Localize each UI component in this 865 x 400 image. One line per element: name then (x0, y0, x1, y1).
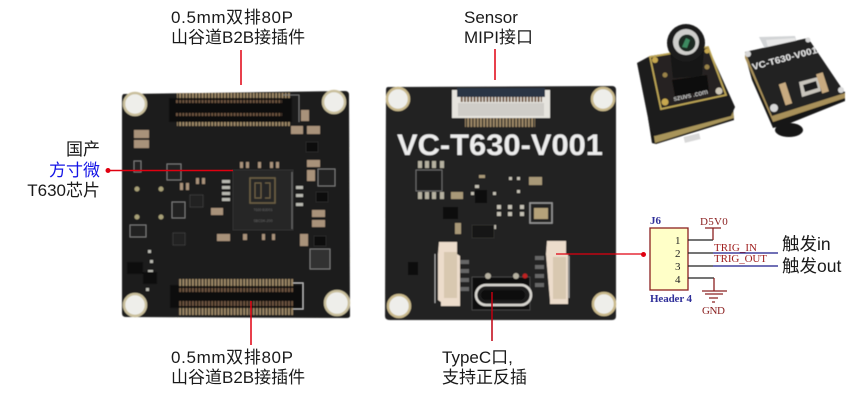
photo: board stack (745, 36, 845, 137)
panel: board front (122, 91, 350, 318)
pcb body back (385, 86, 616, 320)
schematic labels: 2 (675, 248, 680, 260)
schematic labels: J6 (650, 215, 662, 227)
callout: sensor MIPI label (464, 8, 533, 80)
white connector right (535, 241, 569, 304)
small ICs front (130, 142, 335, 269)
photo: camera module (637, 24, 735, 144)
main chip T630: SBCDK-200 (253, 219, 273, 223)
callout: bottom connector label: 山谷道B2B接插件 (171, 368, 305, 387)
callout: Type-C label (442, 292, 527, 387)
top connector (169, 93, 299, 126)
callout: bottom connector label (171, 301, 305, 387)
main chip T630: T630 B3001 (253, 208, 273, 212)
white connector left (435, 242, 469, 306)
callout: bottom connector label: 0.5mm双排80P (171, 348, 293, 367)
schematic labels: 1 (675, 235, 680, 247)
product photos (637, 24, 845, 144)
callout: top connector label (171, 8, 305, 85)
schematic labels: Header 4 (650, 293, 692, 305)
label: trigger out: 触发out (782, 256, 841, 276)
bottom connector (170, 279, 303, 315)
callout: chip label: T630芯片 (27, 181, 100, 200)
main chip T630 (233, 170, 293, 230)
schematic labels: D5V0 (700, 216, 728, 228)
pcb body front (122, 91, 350, 318)
net lines (713, 253, 778, 266)
schematic labels (650, 215, 767, 317)
schematic labels: 4 (675, 274, 681, 286)
callout: chip label: 方寸微 (49, 161, 100, 180)
small components front (134, 110, 325, 246)
callout: chip label (27, 140, 233, 200)
photo: board stack: VC-T630-V001 (751, 45, 818, 72)
callout: Type-C label: TypeC口, (442, 348, 513, 367)
callout: Type-C label: 支持正反插 (442, 368, 527, 387)
callout: top connector label: 0.5mm双排80P (171, 8, 293, 27)
mounting holes back (387, 88, 615, 317)
callout: chip label: 国产 (66, 140, 100, 159)
callout: sensor MIPI label: Sensor (464, 8, 518, 27)
components back (408, 161, 552, 275)
callout: sensor MIPI label: MIPI接口 (464, 28, 533, 47)
schematic labels: TRIG_IN (714, 242, 757, 254)
callout: top connector label: 山谷道B2B接插件 (171, 28, 305, 47)
schematic: J6 header (650, 215, 778, 317)
photo: camera module: szuvs .com (673, 89, 709, 103)
mounting holes front (124, 91, 349, 316)
power and ground (702, 228, 727, 302)
board silk title: VC-T630-V001 (397, 129, 603, 162)
sensor FPC connector (452, 88, 550, 127)
schematic labels: TRIG_OUT (714, 253, 767, 265)
schematic labels: 3 (675, 261, 681, 273)
panel: board back (385, 86, 616, 320)
USB Type-C port (472, 273, 531, 310)
schematic labels: GND (702, 305, 725, 317)
pin wires (688, 240, 714, 278)
label: trigger in: 触发in (782, 234, 831, 254)
header box (650, 228, 688, 290)
arrow: header link (556, 252, 646, 257)
